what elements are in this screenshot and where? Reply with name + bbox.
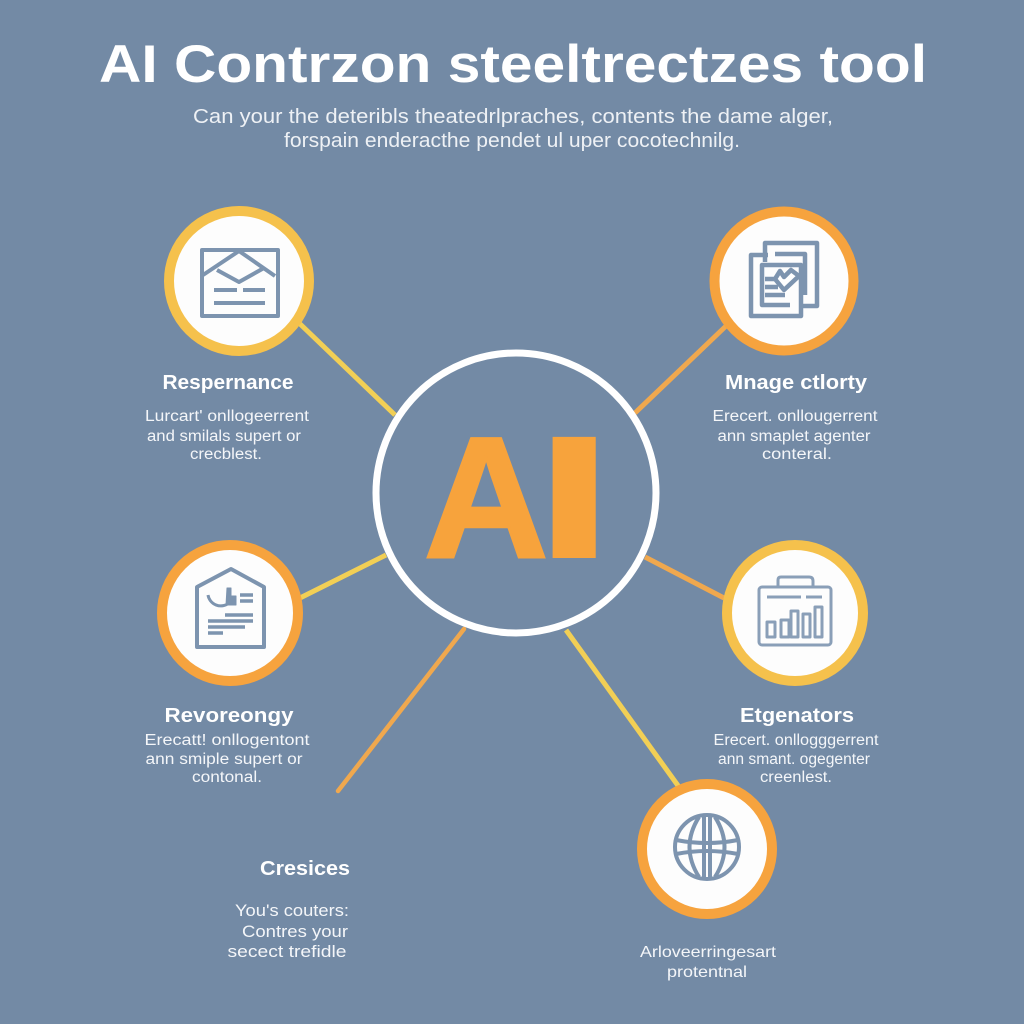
connector: lower left <box>338 629 464 791</box>
text block: Mnage ctlorty: Erecert. onllougerrent <box>712 408 878 425</box>
title: AI Contrzon steeltrectzes tool <box>99 35 927 94</box>
text block: Mnage ctlorty: ann smaplet agenter <box>718 428 870 445</box>
text block: Cresices: You's couters: <box>235 902 349 920</box>
connector: top left <box>298 322 395 415</box>
text block: Cresices <box>228 902 349 961</box>
text block: globe <box>640 944 777 981</box>
central AI label: I <box>533 400 616 596</box>
text block: Etgenators: ann smant. ogegenter <box>718 751 870 768</box>
text block: globe: protentnal <box>667 964 747 981</box>
text block: Mnage ctlorty <box>712 408 878 463</box>
connector: middle right <box>645 557 724 598</box>
text block: Revoreongy: Erecatt! onllogentont <box>144 732 310 749</box>
connector: lower right <box>566 630 679 787</box>
icon: stacked documents <box>751 243 817 316</box>
central AI label <box>424 400 616 596</box>
node: globe <box>642 784 772 914</box>
text block: Respernance: crecblest. <box>190 446 262 463</box>
icon: house document <box>197 569 264 647</box>
text block: Revoreongy: ann smiple supert or <box>146 751 302 768</box>
connector: middle left <box>300 555 386 598</box>
node: Respernance <box>169 211 309 351</box>
icon: briefcase chart <box>759 577 831 645</box>
text block: Revoreongy: contonal. <box>192 769 262 786</box>
node: Cresices <box>228 858 350 961</box>
central AI circle <box>376 353 656 633</box>
subtitle: forspain enderacthe pendet ul uper cocotechnilg. <box>284 130 740 152</box>
subtitle <box>193 106 833 152</box>
text block: Cresices: secect trefidle <box>228 942 346 961</box>
text block: Etgenators: Erecert. onllogggerrent <box>714 732 879 749</box>
text block: Cresices: Contres your <box>242 923 349 941</box>
heading: Cresices: Cresices <box>260 858 350 880</box>
text block: Mnage ctlorty: conteral. <box>762 446 832 463</box>
text block: Revoreongy <box>144 732 310 786</box>
heading: Revoreongy: Revoreongy <box>164 705 294 727</box>
node: Mnage ctlorty <box>714 212 854 350</box>
node: Revoreongy <box>162 545 298 681</box>
text block: Etgenators <box>714 732 879 786</box>
text block: Respernance: Lurcart' onllogeerrent <box>145 408 310 425</box>
connector: top right <box>635 326 726 413</box>
text block: Respernance: and smilals supert or <box>147 428 301 445</box>
node: Etgenators <box>727 545 863 681</box>
heading: Etgenators: Etgenators <box>740 705 854 727</box>
text block: Etgenators: creenlest. <box>760 769 832 786</box>
text block: Respernance <box>145 408 310 463</box>
central AI label: A <box>424 402 548 594</box>
icon: envelope document <box>202 250 278 316</box>
subtitle: Can your the deteribls theatedrlpraches, contents the dame alger, <box>193 106 833 128</box>
heading: Mnage ctlorty: Mnage ctlorty <box>725 372 868 394</box>
icon: globe <box>675 815 739 879</box>
heading: Respernance: Respernance <box>162 372 294 394</box>
text block: globe: Arloveerringesart <box>640 944 777 961</box>
